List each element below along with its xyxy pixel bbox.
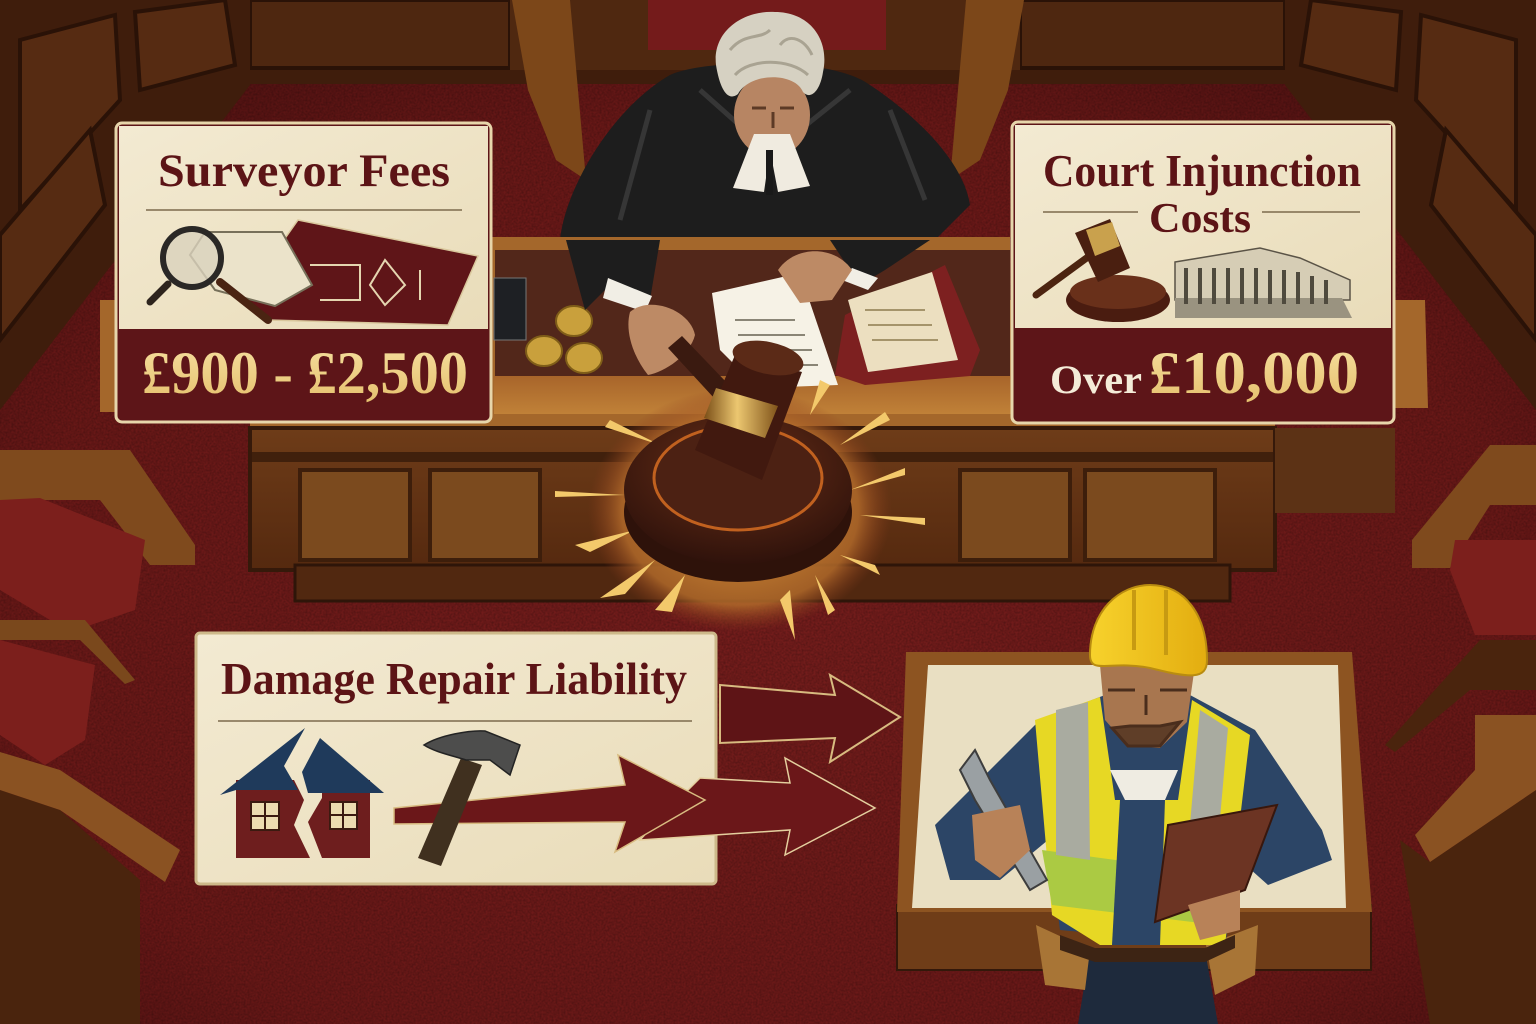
wood panelling: left wall	[0, 0, 250, 410]
background arrows	[720, 675, 900, 762]
icon: courthouse	[1175, 248, 1352, 318]
desk items: book	[494, 278, 526, 340]
heading: Damage Repair Liability	[221, 654, 687, 704]
worker	[935, 585, 1332, 1024]
tool belt pouches	[1036, 925, 1090, 990]
panel: worker platform	[897, 652, 1372, 970]
belt	[1060, 935, 1235, 962]
heading: Court Injunction	[1043, 146, 1361, 196]
panel: court injunction costs	[1012, 122, 1394, 423]
judge bench	[100, 237, 1428, 601]
desk items: coins	[526, 306, 602, 373]
gavel impact burst	[555, 380, 925, 640]
spanner and hand	[960, 750, 1047, 890]
judge sleeves and hands	[566, 240, 930, 375]
icon: gavel	[1036, 219, 1170, 322]
panel: surveyor fees	[116, 123, 491, 422]
sound block	[624, 442, 852, 582]
icon: magnifying glass	[150, 229, 268, 320]
icon: blueprint	[240, 220, 478, 325]
gavel	[624, 335, 852, 582]
right gallery seats	[1385, 445, 1536, 1024]
head	[695, 355, 802, 480]
wood panelling: top wall	[0, 0, 1536, 180]
head	[1100, 665, 1195, 748]
panel: court injunction costs: £10,000	[1149, 340, 1359, 406]
price: Over	[1050, 357, 1142, 402]
handle	[668, 336, 728, 398]
wood panelling: right wall	[1285, 0, 1536, 410]
panel: damage repair liability	[196, 633, 900, 884]
left gallery seats	[0, 450, 195, 1024]
body	[935, 695, 1332, 945]
hard hat	[1090, 585, 1207, 675]
hi-vis vest	[1035, 697, 1250, 945]
icon: papers	[190, 232, 312, 306]
trousers	[1078, 950, 1218, 1024]
icon: cracked house	[220, 728, 384, 858]
judge head and wig	[734, 73, 810, 157]
arrows across panel	[394, 755, 875, 855]
price: £900 - £2,500	[142, 340, 468, 406]
judge robe	[560, 63, 970, 245]
panel: court injunction costs: Costs	[1149, 196, 1251, 242]
heading: Surveyor Fees	[158, 145, 450, 197]
clipboard	[1155, 805, 1277, 922]
desk items: documents	[712, 265, 980, 388]
judge	[560, 12, 970, 245]
icon: hammer	[418, 731, 520, 866]
judge collar bands	[733, 134, 810, 192]
